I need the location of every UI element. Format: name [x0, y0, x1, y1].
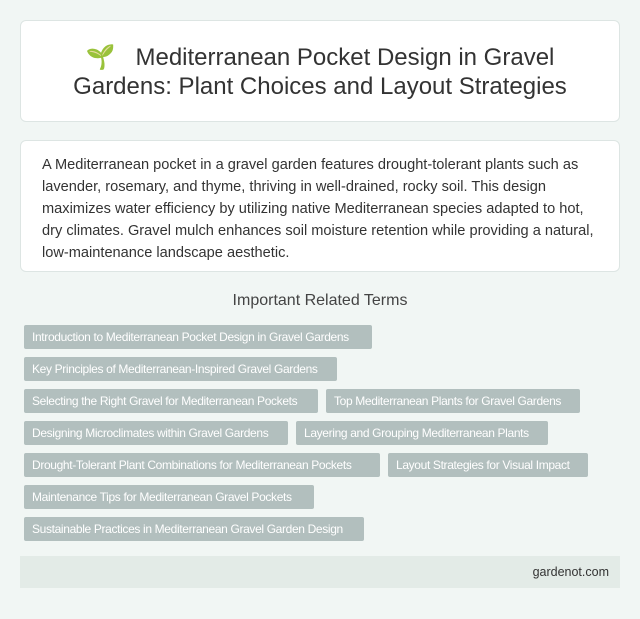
tag 5: Designing Microclimates within Gravel Gardens: [32, 426, 268, 440]
description text: A Mediterranean pocket in a gravel garden features drought-tolerant plants such as: [42, 157, 578, 173]
tag 6: [296, 421, 548, 445]
tag 2: Key Principles of Mediterranean-Inspired Gravel Gardens: [32, 362, 318, 376]
tag 7: [24, 453, 380, 477]
tag 8: Layout Strategies for Visual Impact: [396, 458, 570, 472]
tag 7: Drought-Tolerant Plant Combinations for Mediterranean Pockets: [32, 458, 352, 472]
title card: [20, 20, 620, 122]
tag 4: Top Mediterranean Plants for Gravel Gardens: [334, 394, 561, 408]
description card: [20, 140, 620, 272]
title: Gardens: Plant Choices and Layout Strategies: [73, 73, 567, 100]
tag 1: Introduction to Mediterranean Pocket Design in Gravel Gardens: [32, 330, 349, 344]
tag 9: [24, 485, 314, 509]
footer source: gardenot.com: [533, 565, 609, 579]
title: [73, 44, 567, 100]
footer: [20, 556, 620, 588]
tag 5: [24, 421, 288, 445]
tag 8: [388, 453, 588, 477]
tag 10: [24, 517, 364, 541]
tag 3: Selecting the Right Gravel for Mediterranean Pockets: [32, 394, 297, 408]
description text: dry climates. Gravel mulch enhances soil moisture retention while providing a natural,: [42, 223, 594, 239]
title: 🌱 Mediterranean Pocket Design in Gravel: [86, 44, 554, 71]
description text: lavender, rosemary, and thyme, thriving in well-drained, rocky soil. This design: [42, 179, 546, 195]
tag 6: Layering and Grouping Mediterranean Plants: [304, 426, 529, 440]
description text: low-maintenance landscape aesthetic.: [42, 245, 289, 261]
tag 9: Maintenance Tips for Mediterranean Gravel Pockets: [32, 490, 292, 504]
tag 2: [24, 357, 337, 381]
heading: related terms: Important Related Terms: [233, 292, 407, 309]
description text: maximizes water efficiency by utilizing native Mediterranean species adapted to hot,: [42, 201, 584, 217]
tag 1: [24, 325, 372, 349]
tag 4: [326, 389, 580, 413]
tag 10: Sustainable Practices in Mediterranean Gravel Garden Design: [32, 522, 343, 536]
tag 3: [24, 389, 318, 413]
description text: [42, 157, 594, 261]
